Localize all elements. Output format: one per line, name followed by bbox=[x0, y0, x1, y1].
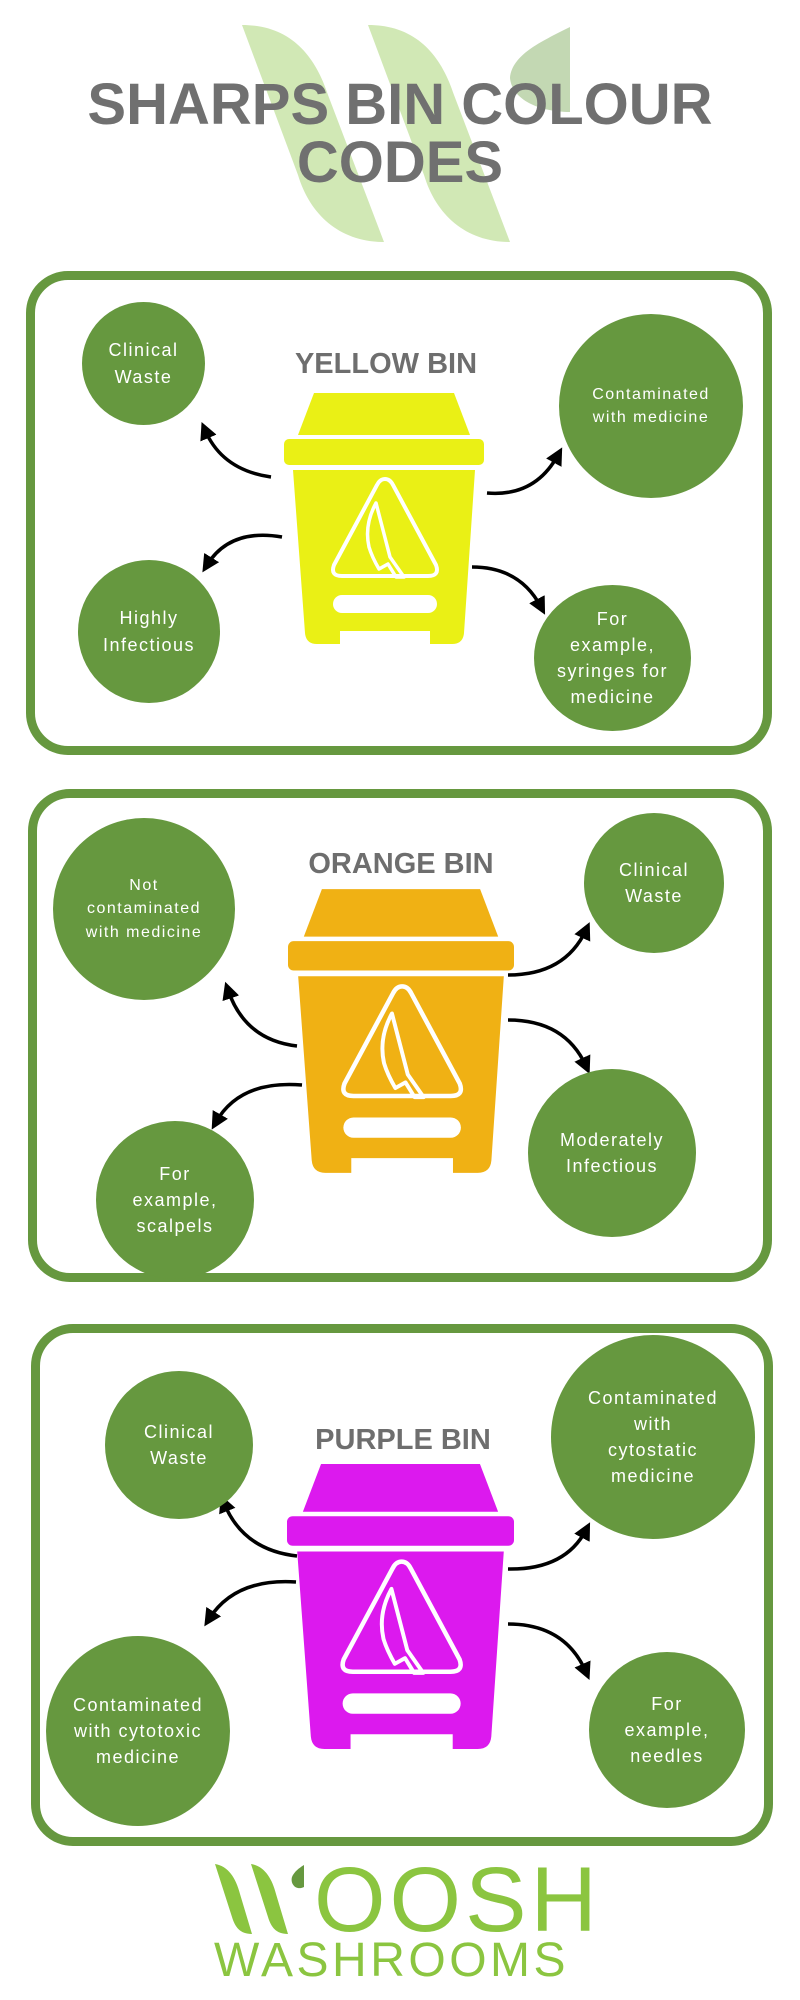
circle: moderately infectious: Infectious bbox=[566, 1156, 658, 1176]
circle: highly infectious: Infectious bbox=[103, 634, 195, 654]
circle: needles: For bbox=[651, 1694, 683, 1714]
circle: contaminated with medicine: Contaminated bbox=[592, 386, 710, 403]
panel: purple bin bbox=[31, 1324, 773, 1846]
heading: purple bin: PURPLE BIN bbox=[315, 1424, 491, 1456]
circle: cytotoxic: with cytotoxic bbox=[74, 1721, 202, 1741]
circle: clinical waste: Waste bbox=[625, 886, 683, 906]
circle: needles: example, bbox=[624, 1720, 710, 1740]
watermark logo bbox=[242, 25, 570, 242]
logo: woosh washrooms: WASHROOMS bbox=[214, 1934, 569, 1987]
panel: orange bin bbox=[28, 789, 772, 1282]
circle: clinical waste: Waste bbox=[115, 366, 172, 386]
circle: contaminated with medicine: with medicine bbox=[593, 409, 709, 426]
circle: for example syringes: example, bbox=[570, 635, 655, 655]
icon: orange bin bbox=[288, 889, 514, 1173]
title bbox=[87, 72, 713, 195]
circle: not contaminated: with medicine bbox=[86, 924, 202, 941]
circle: clinical waste bbox=[82, 302, 205, 425]
logo: woosh washrooms bbox=[214, 1849, 601, 1987]
circle: for example scalpels: For bbox=[159, 1164, 191, 1184]
circle: needles: needles bbox=[630, 1746, 704, 1766]
circle: for example scalpels bbox=[96, 1121, 254, 1279]
circle: cytostatic: Contaminated bbox=[588, 1388, 718, 1408]
circle: moderately infectious: Moderately bbox=[560, 1130, 664, 1150]
circle: for example scalpels: scalpels bbox=[136, 1216, 214, 1236]
circle: cytotoxic: medicine bbox=[96, 1747, 180, 1767]
circle: cytostatic bbox=[551, 1335, 755, 1539]
circle: clinical waste bbox=[584, 813, 724, 953]
circle: for example scalpels: example, bbox=[132, 1190, 218, 1210]
title: CODES bbox=[297, 130, 503, 195]
circle: clinical waste bbox=[105, 1371, 253, 1519]
icon: purple bin bbox=[287, 1464, 514, 1749]
heading: orange bin: ORANGE BIN bbox=[308, 848, 494, 880]
circle: for example syringes: medicine bbox=[570, 687, 655, 707]
circle: not contaminated: Not bbox=[129, 877, 159, 894]
heading: yellow bin: YELLOW BIN bbox=[295, 348, 477, 380]
circle: highly infectious: Highly bbox=[119, 608, 178, 628]
circle: clinical waste: Clinical bbox=[619, 860, 689, 880]
circle: not contaminated bbox=[53, 818, 235, 1000]
circle: clinical waste: Waste bbox=[150, 1448, 208, 1468]
circle: cytostatic: with bbox=[634, 1414, 672, 1434]
circle: needles bbox=[589, 1652, 745, 1808]
circle: cytotoxic bbox=[46, 1636, 230, 1826]
circle: cytostatic: cytostatic bbox=[608, 1440, 698, 1460]
circle: for example syringes: For bbox=[597, 609, 628, 629]
circle: cytostatic: medicine bbox=[611, 1466, 695, 1486]
circle: for example syringes: syringes for bbox=[557, 661, 668, 681]
circle: moderately infectious bbox=[528, 1069, 696, 1237]
circle: not contaminated: contaminated bbox=[87, 900, 201, 917]
circle: cytotoxic: Contaminated bbox=[73, 1695, 203, 1715]
panel: yellow bin bbox=[26, 271, 772, 755]
icon: yellow bin bbox=[284, 393, 484, 644]
circle: contaminated with medicine bbox=[559, 314, 743, 498]
title: SHARPS BIN COLOUR bbox=[87, 72, 713, 137]
circle: clinical waste: Clinical bbox=[108, 340, 179, 360]
circle: for example syringes bbox=[534, 585, 691, 731]
logo: woosh washrooms: OOSH bbox=[314, 1849, 601, 1951]
circle: highly infectious bbox=[78, 560, 220, 703]
circle: clinical waste: Clinical bbox=[144, 1422, 214, 1442]
